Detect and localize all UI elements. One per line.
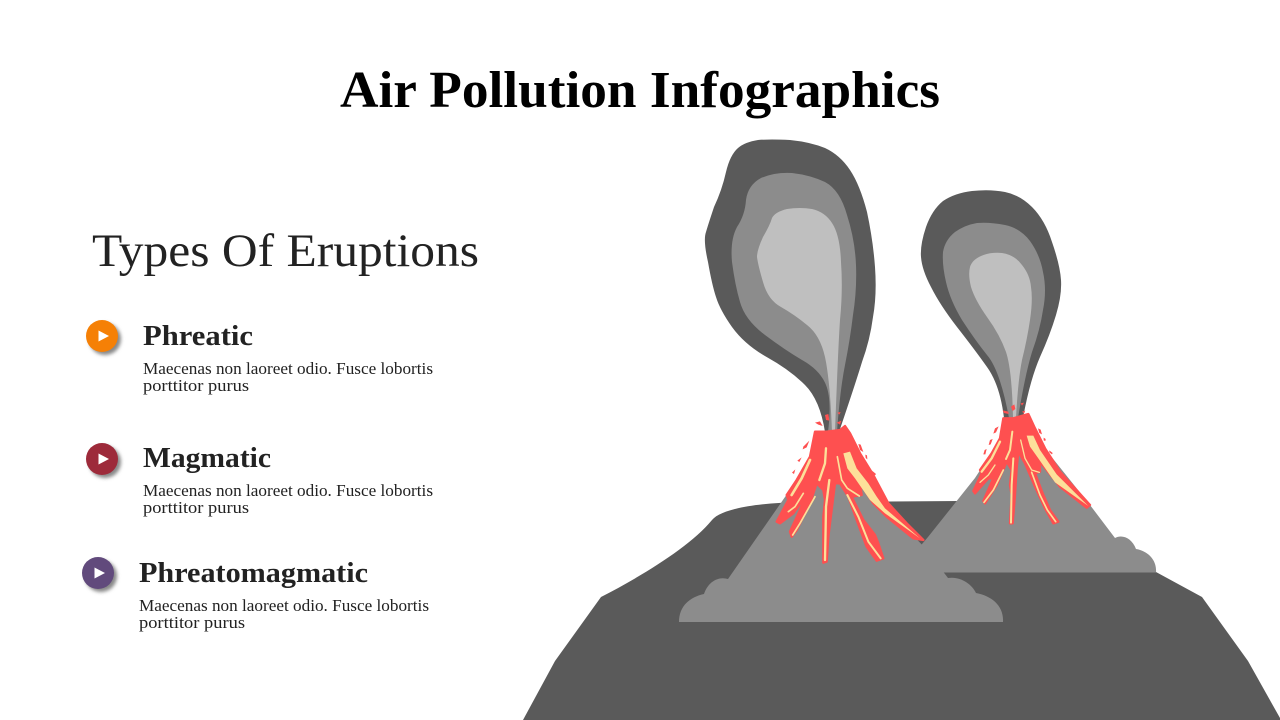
icon: red play button [86,443,121,478]
icon: orange play button [86,320,121,355]
right volcano cone [900,420,1156,572]
smoke plume: right [921,190,1061,418]
lava: left volcano [777,412,923,563]
body text: phreatomagmatic: porttitor purus [139,613,245,632]
body text: phreatic [143,359,433,395]
left volcano cone [679,440,1003,622]
body text: magmatic [143,481,433,517]
left volcano [679,140,1003,622]
list item: magmatic [86,443,433,517]
heading: magmatic: Magmatic [143,443,271,474]
list item: phreatomagmatic [82,557,429,632]
body text: phreatomagmatic [139,596,429,632]
icon: purple play button [82,557,117,592]
heading: phreatic: Phreatic [143,321,253,352]
heading: phreatomagmatic: Phreatomagmatic [139,558,368,589]
ground hill [523,501,1280,720]
lava: right volcano [973,403,1090,523]
body text: phreatomagmatic: Maecenas non laoreet odio. Fusce lobortis [139,596,429,615]
title: Air Pollution Infographics [340,62,940,119]
body text: magmatic: porttitor purus [143,498,249,517]
right volcano [900,190,1156,572]
list item: phreatic [86,320,433,395]
heading: types of eruptions: Types Of Eruptions [92,225,479,277]
body text: phreatic: Maecenas non laoreet odio. Fusce lobortis [143,359,433,378]
smoke plume: left [705,140,876,432]
body text: phreatic: porttitor purus [143,376,249,395]
body text: magmatic: Maecenas non laoreet odio. Fusce lobortis [143,481,433,500]
